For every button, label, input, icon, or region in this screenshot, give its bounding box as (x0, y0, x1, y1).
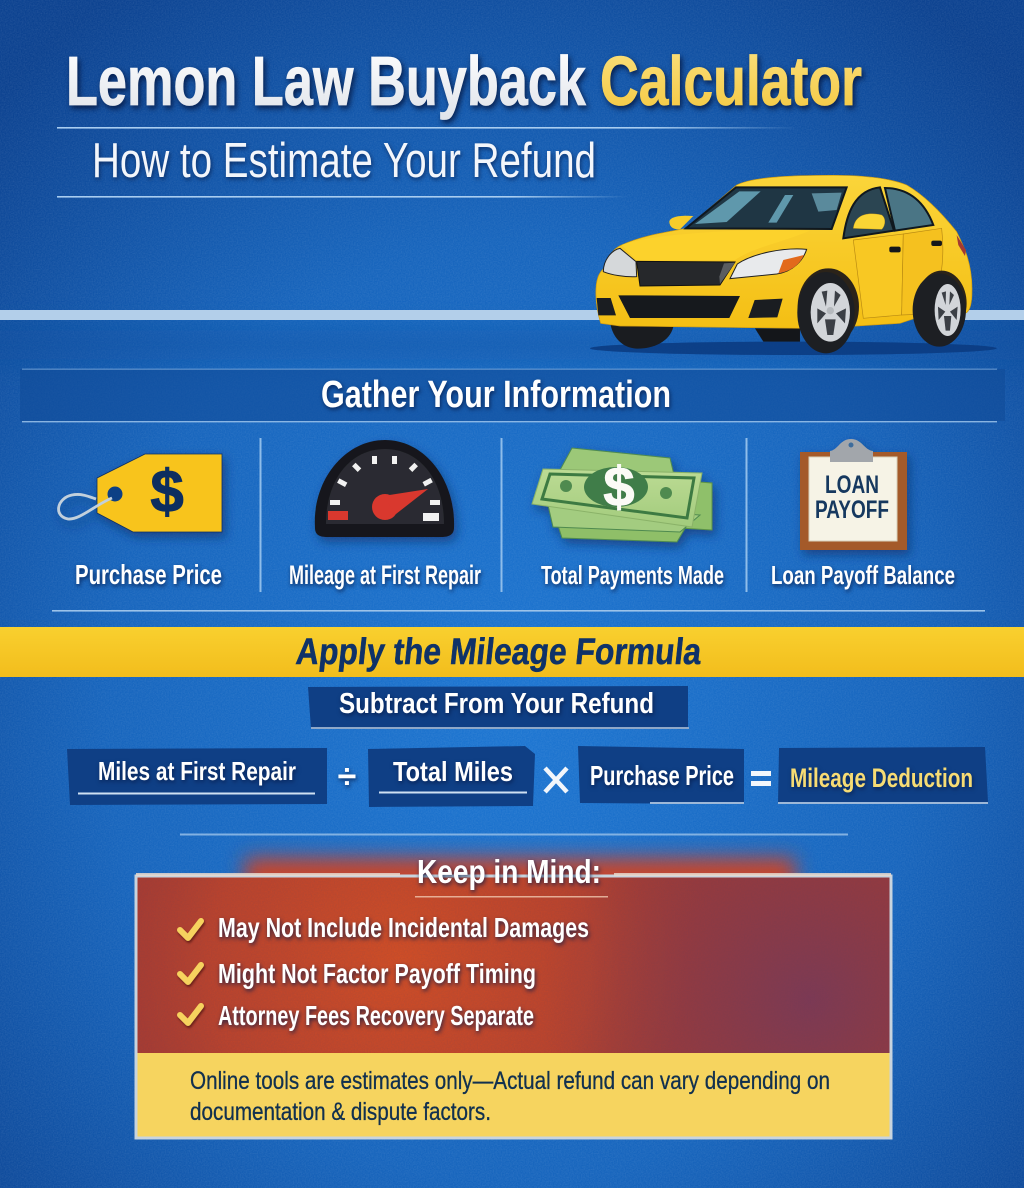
front wheel (797, 268, 859, 353)
icon: speedometer (315, 440, 454, 537)
red panel (136, 876, 891, 1054)
item: total payments made (532, 448, 724, 590)
lower intake (618, 295, 740, 318)
row 2: Might Not Factor Payoff Timing (218, 958, 536, 989)
item: purchase price (59, 454, 222, 590)
label: Total Payments Made (541, 560, 724, 590)
label: Loan Payoff Balance (771, 560, 955, 590)
icon: price tag: $ (150, 458, 184, 525)
back bills (560, 448, 674, 475)
yellow note: documentation & dispute factors. (190, 1098, 491, 1126)
icon: clipboard: LOAN (825, 471, 879, 499)
heading (136, 853, 891, 898)
operator: equals (751, 771, 771, 786)
subtitle: How to Estimate Your Refund (92, 134, 596, 188)
headlights (603, 248, 637, 277)
section band: gather your information (20, 368, 1005, 422)
row 3 (180, 1000, 534, 1031)
heading: Apply the Mileage Formula (294, 630, 704, 672)
mirrors (669, 216, 693, 229)
checklist (180, 912, 589, 1031)
icon: clipboard: PAYOFF (815, 496, 889, 524)
title: Calculator (600, 42, 862, 120)
car body (596, 175, 972, 328)
door handles (889, 247, 901, 252)
top bill (532, 469, 702, 527)
grille (637, 261, 735, 286)
icon: price tag (59, 454, 222, 532)
panel: keep in mind (136, 853, 891, 1138)
road stripe (0, 310, 1024, 320)
operator: times (545, 768, 567, 792)
heading: Gather Your Information (321, 374, 671, 416)
term: mileage deduction: Mileage Deduction (790, 763, 973, 793)
term: purchase price: Purchase Price (590, 760, 734, 791)
item: mileage at first repair (289, 440, 481, 590)
doors (853, 234, 903, 318)
term: mileage deduction (778, 747, 988, 804)
far front tyre (611, 325, 673, 349)
subheading: subtract from your refund (308, 686, 689, 729)
term: total miles: Total Miles (393, 756, 513, 787)
section band: apply the mileage formula (0, 627, 1024, 677)
item: loan payoff balance (771, 439, 955, 590)
yellow note: Online tools are estimates only—Actual refund can vary depending on (190, 1067, 830, 1095)
term: purchase price (578, 746, 744, 804)
side windows (843, 187, 894, 238)
rear wheel (913, 271, 967, 347)
row 1: May Not Include Incidental Damages (218, 912, 589, 943)
icon: cash stack: $ (603, 455, 635, 518)
label: Mileage at First Repair (289, 560, 481, 590)
heading: Keep in Mind: (417, 853, 601, 890)
windshield (686, 187, 847, 229)
yellow note (136, 1053, 891, 1138)
title: Lemon Law Buyback (66, 42, 586, 120)
term: miles at first repair (67, 748, 327, 805)
formula (67, 746, 988, 807)
subheading: subtract from your refund: Subtract From Your Refund (339, 688, 654, 720)
icon: clipboard (800, 439, 907, 550)
column dividers (260, 438, 748, 592)
icon: yellow car (590, 175, 997, 355)
tail light (957, 235, 966, 256)
operator: divide: ÷ (338, 758, 356, 796)
red glow (245, 858, 795, 898)
icon: cash stack (532, 448, 712, 542)
label: Purchase Price (75, 559, 222, 590)
panel border (136, 876, 891, 1138)
row 3: Attorney Fees Recovery Separate (218, 1000, 534, 1031)
term: miles at first repair: Miles at First Repair (98, 756, 296, 786)
term: total miles (368, 746, 535, 807)
car shadow (590, 342, 997, 355)
